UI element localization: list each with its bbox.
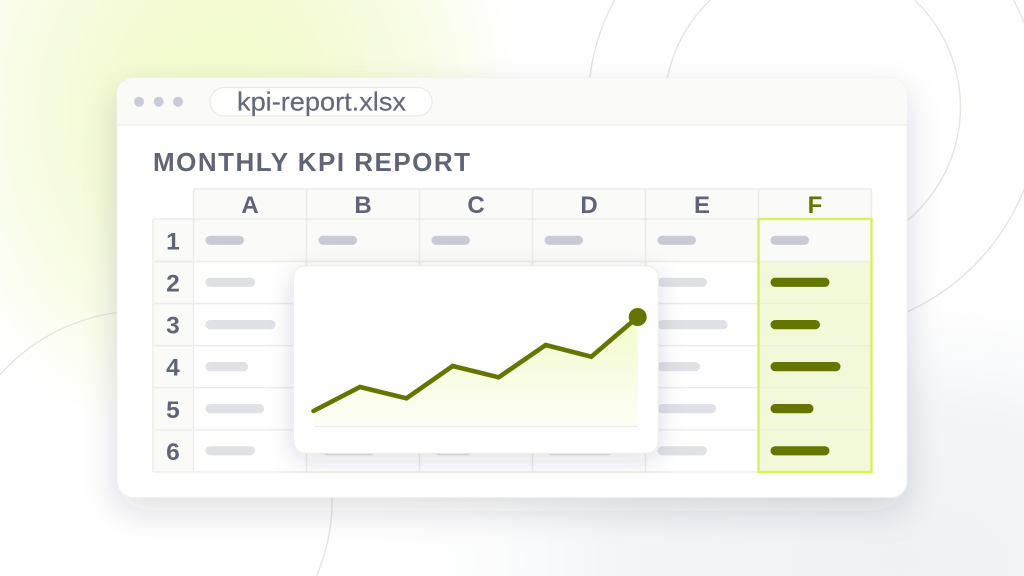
row numbers (166, 228, 180, 466)
panel: spreadsheet window (117, 78, 907, 498)
panel: line chart card (293, 266, 658, 453)
row numbers: 3 (166, 312, 180, 340)
header row placeholder bars (206, 236, 809, 245)
header cell backgrounds (153, 189, 872, 472)
row numbers: 1 (166, 228, 180, 256)
window control dots (134, 97, 183, 107)
file name pill: kpi-report.xlsx (237, 86, 406, 116)
end point marker (629, 308, 647, 326)
spreadsheet table (153, 189, 872, 472)
trend line (314, 317, 638, 411)
column letters: D (580, 192, 598, 219)
row numbers: 2 (166, 270, 180, 298)
chart baseline (314, 426, 638, 428)
column letters: E (694, 192, 710, 219)
column letters: C (467, 192, 485, 219)
column letters: B (354, 192, 372, 219)
column letters (241, 192, 822, 219)
data row placeholder bars (206, 278, 728, 455)
column letters: A (241, 192, 259, 219)
title bar (117, 78, 907, 125)
row numbers: 4 (166, 354, 180, 382)
highlighted column fill (758, 262, 872, 472)
heading: MONTHLY KPI REPORT (153, 147, 470, 177)
chart area fill (314, 317, 638, 426)
column F values (770, 278, 840, 455)
column letters: F (808, 192, 822, 219)
row numbers: 6 (166, 439, 180, 466)
column F highlight border (758, 219, 872, 472)
row numbers: 5 (166, 397, 180, 424)
grid lines (153, 189, 872, 472)
